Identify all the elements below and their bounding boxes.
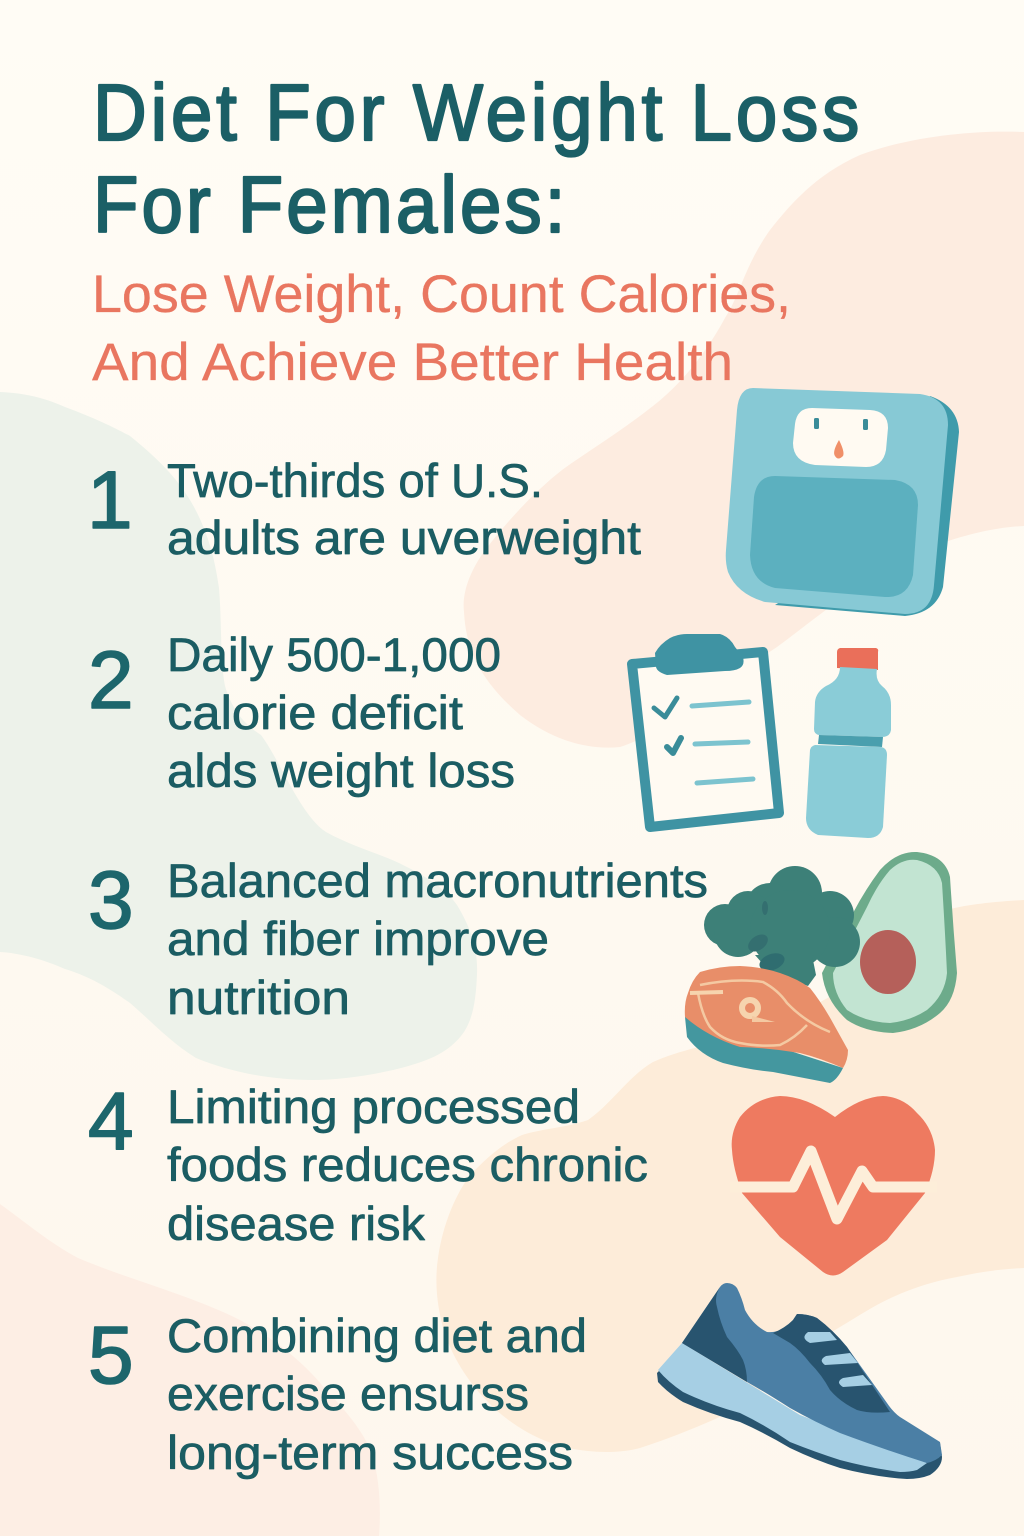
title: Diet For Weight Loss	[93, 69, 859, 158]
icon: clipboard	[632, 634, 779, 827]
scale display	[793, 408, 888, 467]
item 1 text: adults are uverweight	[167, 511, 641, 564]
item 3 number: 3	[88, 855, 134, 946]
subtitle	[92, 265, 791, 392]
item 2 text	[167, 628, 515, 797]
icon: water bottle	[806, 648, 891, 838]
item 2 number: 2	[88, 635, 134, 726]
icon: heart with pulse	[730, 1096, 937, 1276]
item 4 text	[167, 1080, 648, 1250]
icon: avocado	[822, 852, 957, 1033]
item 2 text: alds weight loss	[167, 744, 515, 797]
subtitle: Lose Weight, Count Calories,	[92, 265, 791, 324]
item 3 text: Balanced macronutrients	[167, 854, 708, 907]
icon: broccoli	[704, 866, 860, 986]
item 4 text: foods reduces chronic	[167, 1138, 648, 1191]
item 5 text: long-term success	[167, 1426, 573, 1479]
subtitle: And Achieve Better Health	[92, 333, 733, 392]
item 3 text: and fiber improve	[167, 912, 549, 965]
item 2 text: calorie deficit	[167, 686, 463, 739]
icon: running shoe	[657, 1283, 942, 1479]
item 3 text: nutrition	[167, 971, 350, 1024]
title: For Females:	[93, 161, 565, 250]
icon: bathroom scale	[726, 388, 959, 616]
item 1 number: 1	[87, 455, 133, 546]
item 1 text	[167, 454, 641, 564]
item 5 text: Combining diet and	[167, 1309, 587, 1362]
item 4 text: disease risk	[167, 1197, 426, 1250]
item 4 number: 4	[88, 1076, 134, 1167]
item 1 text: Two-thirds of U.S.	[167, 454, 543, 507]
item 3 text	[167, 854, 708, 1024]
item 5 number: 5	[88, 1310, 134, 1401]
icon: salmon	[685, 966, 848, 1083]
item 5 text	[167, 1309, 587, 1479]
item 2 text: Daily 500-1,000	[167, 628, 501, 681]
title	[93, 69, 859, 250]
item 5 text: exercise ensurss	[167, 1367, 529, 1420]
scale platform	[750, 476, 918, 597]
item 4 text: Limiting processed	[167, 1080, 580, 1133]
